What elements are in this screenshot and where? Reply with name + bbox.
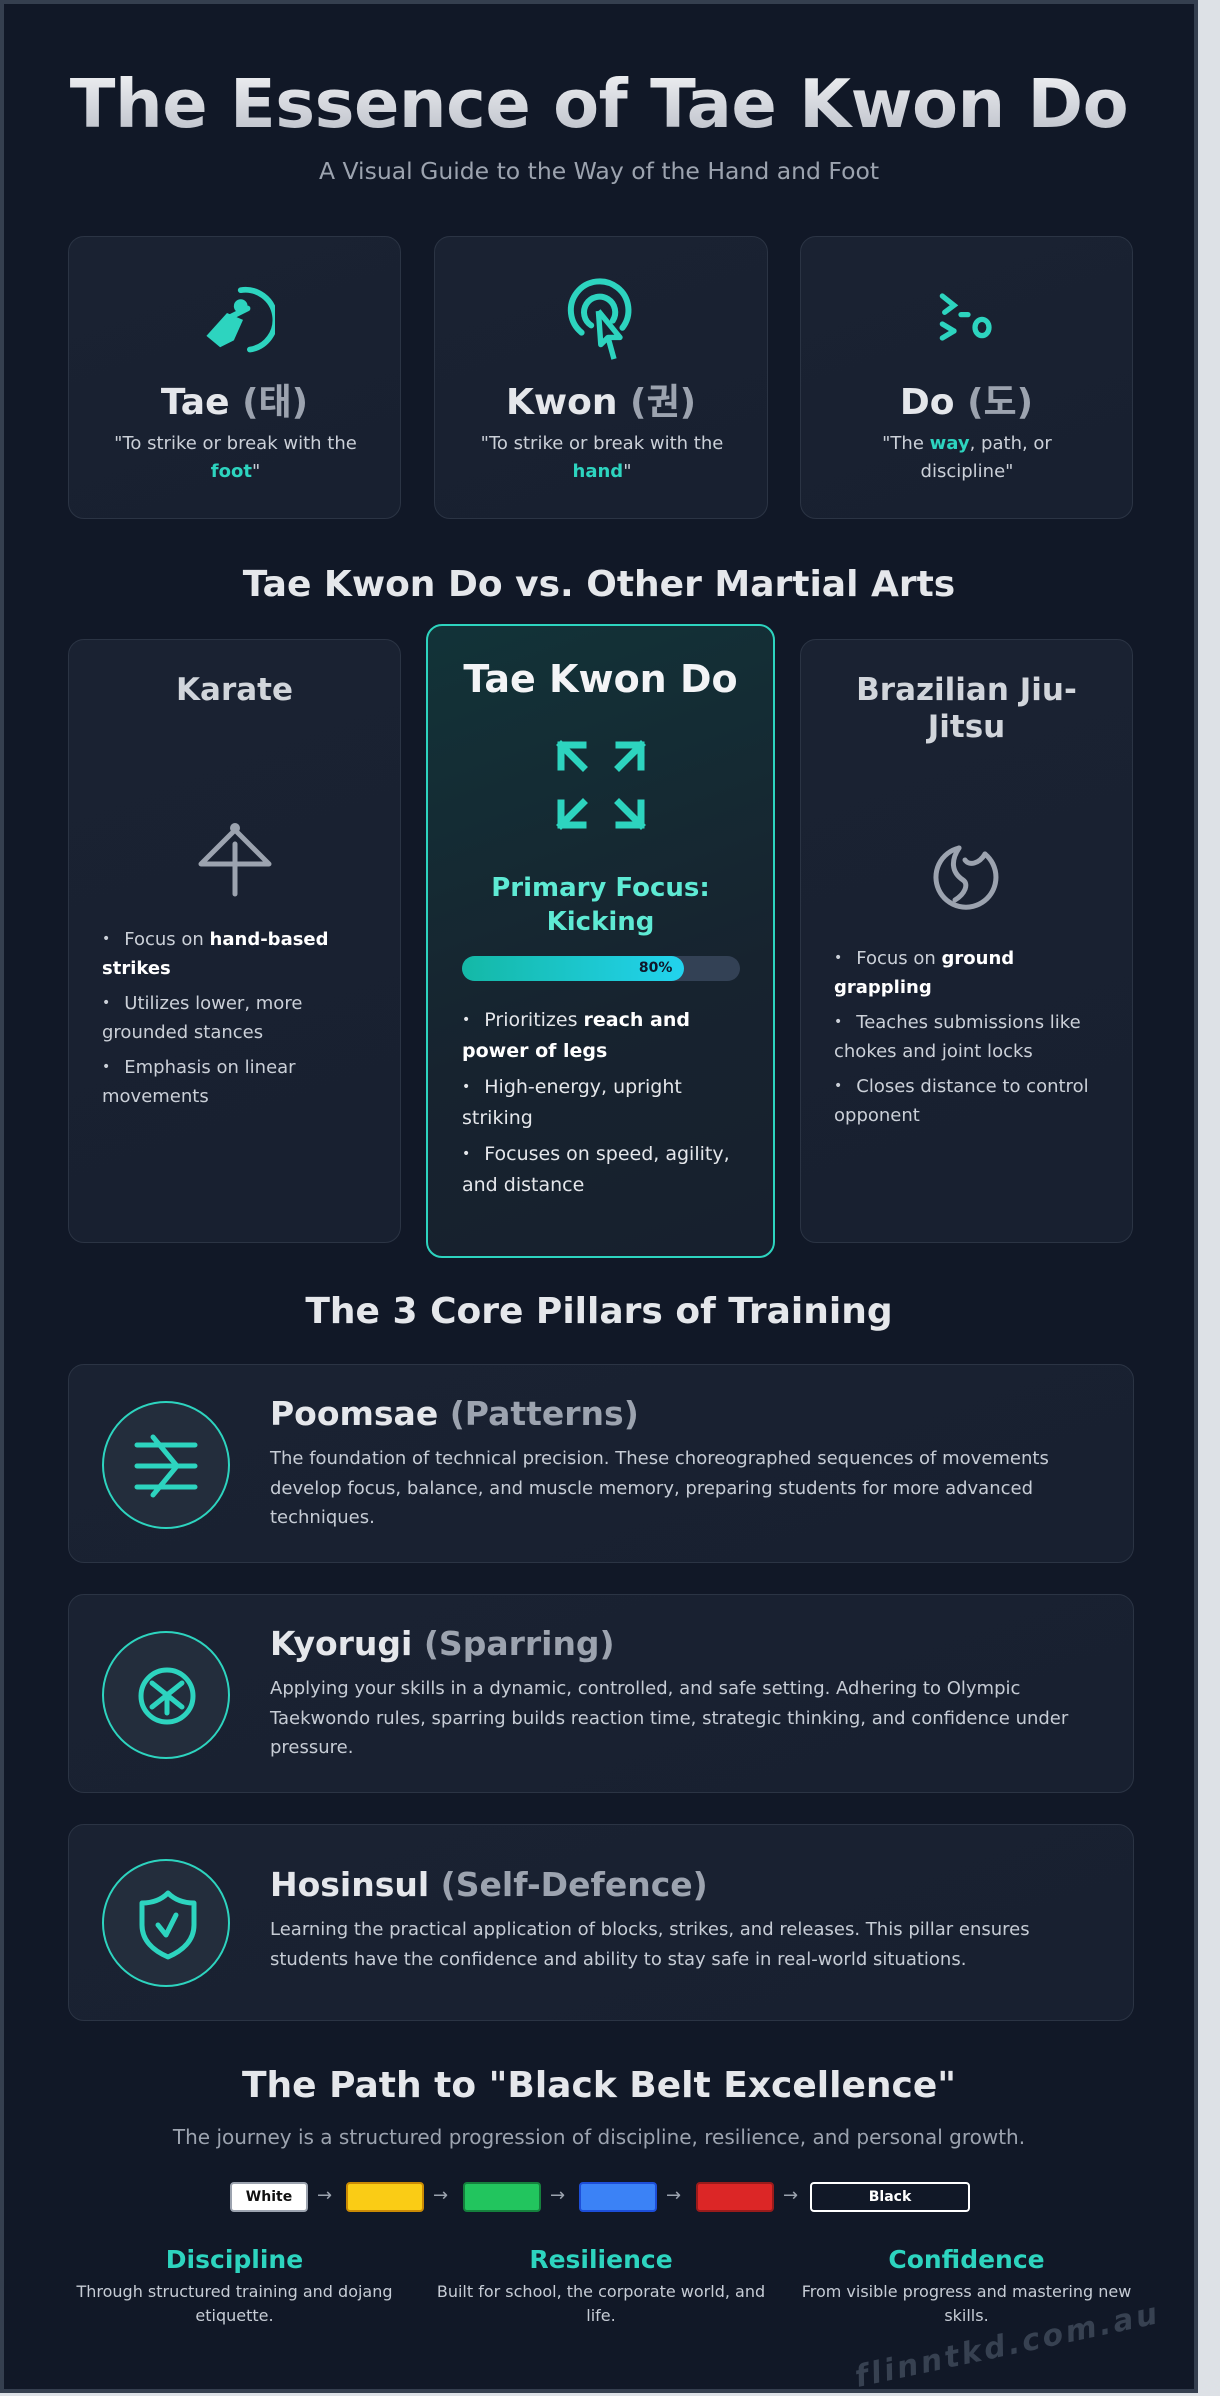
- heading: Kwon: Kwon (권): [506, 382, 696, 423]
- heading: pillars: The 3 Core Pillars of Training: [305, 1291, 893, 1332]
- panel: Tae: [68, 236, 401, 519]
- panel: Kyorugi: [68, 1594, 1134, 1793]
- bullet list: Focus on ground grappling: [834, 948, 1014, 998]
- heading: Tae Kwon Do: [463, 657, 738, 701]
- title: Kyorugi (Sparring): [270, 1624, 615, 1663]
- belt progression: →: [433, 2185, 448, 2206]
- bullet list: [834, 948, 1089, 1126]
- text: "To strike or break with the hand": [481, 433, 723, 482]
- icon: stance: [198, 823, 272, 896]
- heading: Brazilian Jiu-: [856, 672, 1077, 708]
- text: "To strike or break with the foot": [114, 433, 357, 482]
- belt progression: →: [550, 2185, 565, 2206]
- icon: kick: [206, 286, 275, 352]
- heading: Jitsu: [928, 709, 1005, 745]
- panel: Kwon: [434, 236, 768, 519]
- text: The foundation of technical precision. These choreographed sequences of movements develop focus, balance, and muscle memory, preparing students for more advanced techniques.: [270, 1448, 1049, 1528]
- text: "The way, path, or discipline": [882, 433, 1052, 482]
- panel: Tae Kwon Do (featured): [426, 624, 775, 1258]
- bullet list: Closes distance to control opponent: [834, 1076, 1089, 1126]
- column: Confidence: From visible progress and mastering new skills.: [802, 2282, 1131, 2325]
- title: The Essence of Tae Kwon Do: [70, 65, 1128, 143]
- belt progression: →: [666, 2185, 681, 2206]
- heading: Do: Do (도): [900, 382, 1033, 423]
- heading: path: The Path to "Black Belt Excellence": [242, 2065, 956, 2106]
- subtitle: A Visual Guide to the Way of the Hand and Foot: [319, 157, 879, 185]
- belt progression: →: [317, 2185, 332, 2206]
- bullet list: Emphasis on linear movements: [102, 1057, 296, 1107]
- column: Discipline: Discipline: [166, 2245, 303, 2274]
- bullet list: High-energy, upright striking: [462, 1076, 682, 1129]
- icon: grapple: [933, 846, 998, 910]
- column: Resilience: Built for school, the corporate world, and life.: [437, 2282, 765, 2325]
- belt progression: White: [246, 2189, 292, 2205]
- panel: Karate: [68, 639, 401, 1243]
- bullet list: Utilizes lower, more grounded stances: [102, 993, 302, 1043]
- progress bar: 80%: [639, 960, 672, 976]
- column: Discipline: Through structured training and dojang etiquette.: [76, 2282, 393, 2325]
- column: Resilience: Resilience: [529, 2245, 673, 2274]
- text: Applying your skills in a dynamic, controlled, and safe setting. Adhering to Olympic Taekwondo rules, sparring builds reaction time, strategic thinking, and confidence under pressure.: [270, 1678, 1068, 1758]
- bullet list: [102, 929, 329, 1107]
- heading: [856, 672, 1077, 745]
- panel: Hosinsul: [68, 1824, 1134, 2021]
- panel: BJJ: [800, 639, 1133, 1243]
- bullet list: Teaches submissions like chokes and joint locks: [834, 1012, 1081, 1062]
- title: Poomsae (Patterns): [270, 1394, 639, 1433]
- primary focus: [491, 873, 710, 937]
- column: Confidence: Confidence: [888, 2245, 1045, 2274]
- belt progression: [230, 2182, 970, 2212]
- primary focus: Primary Focus:: [491, 873, 710, 903]
- belt progression: →: [783, 2185, 798, 2206]
- belt progression: Black: [869, 2189, 911, 2205]
- icon: path: [940, 293, 992, 341]
- icon: sparring: [102, 1631, 230, 1759]
- icon: shield: [102, 1859, 230, 1987]
- icon: hand pointer: [568, 278, 632, 360]
- heading: comparison: Tae Kwon Do vs. Other Martial Arts: [243, 564, 955, 605]
- title: Hosinsul (Self-Defence): [270, 1865, 708, 1904]
- subtitle: path: The journey is a structured progression of discipline, resilience, and personal growth.: [173, 2125, 1025, 2149]
- icon: patterns: [102, 1401, 230, 1529]
- text: Learning the practical application of blocks, strikes, and releases. This pillar ensures students have the confidence and ability to stay safe in real-world situations.: [270, 1919, 1030, 1970]
- panel: Do: [800, 236, 1133, 519]
- progress bar: [462, 956, 740, 981]
- primary focus: Kicking: [547, 907, 654, 937]
- watermark: flinntkd.com.au: [852, 2296, 1163, 2395]
- column: Confidence: [802, 2245, 1131, 2325]
- bullet list: Prioritizes reach and power of legs: [462, 1009, 690, 1062]
- bullet list: [462, 1009, 730, 1196]
- bullet list: Focus on hand-based strikes: [102, 929, 329, 979]
- icon: expand arrows: [556, 740, 646, 830]
- column: Resilience: [437, 2245, 765, 2325]
- bullet list: Focuses on speed, agility, and distance: [462, 1143, 730, 1196]
- heading: Tae: Tae (태): [161, 382, 308, 423]
- heading: Karate: [176, 672, 293, 708]
- panel: Poomsae: [68, 1364, 1134, 1563]
- column: Discipline: [76, 2245, 393, 2325]
